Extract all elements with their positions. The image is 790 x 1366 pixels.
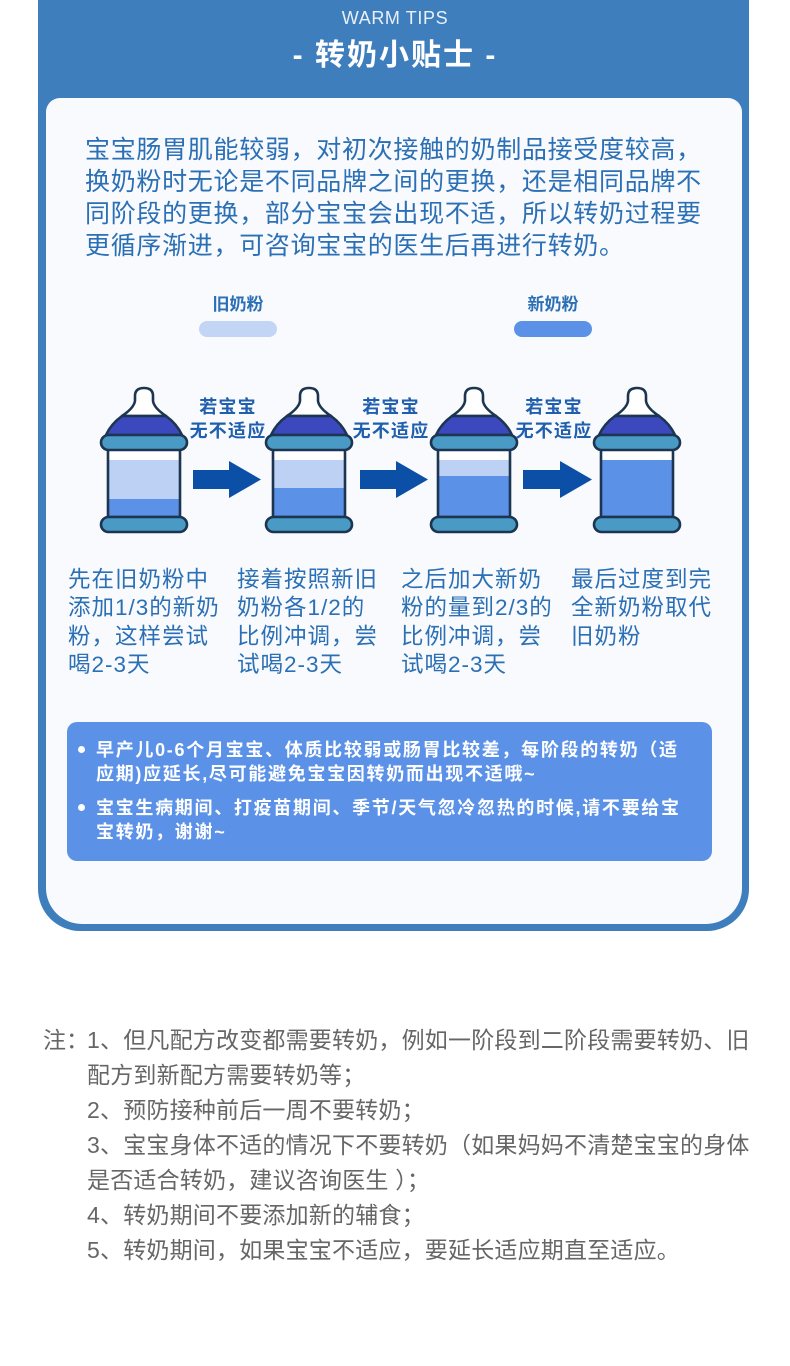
step 1 text: 喝2-3天 bbox=[68, 652, 151, 677]
arrow 2 bbox=[360, 461, 428, 498]
caution 1 text: 早产儿0-6个月宝宝、体质比较弱或肠胃比较差，每阶段的转奶（适 bbox=[96, 740, 679, 760]
caution 2 text: 宝转奶，谢谢~ bbox=[96, 822, 226, 842]
step 3 text: 比例冲调，尝 bbox=[401, 624, 542, 648]
intro paragraph: 同阶段的更换，部分宝宝会出现不适，所以转奶过程要 bbox=[85, 200, 702, 228]
intro paragraph bbox=[85, 136, 702, 260]
bottle 1: one third new bbox=[101, 388, 187, 532]
arrow caption 3: 若宝宝 bbox=[525, 397, 583, 417]
arrow caption 2: 若宝宝 bbox=[362, 397, 420, 417]
step 4 text bbox=[571, 566, 712, 648]
arrow caption 3: 无不适应 bbox=[516, 421, 592, 441]
step 1 text: 先在旧奶粉中 bbox=[68, 566, 209, 592]
step 4 text: 最后过度到完 bbox=[571, 566, 712, 592]
arrow caption 1: 若宝宝 bbox=[199, 397, 257, 417]
arrow caption 1 bbox=[190, 397, 266, 441]
notes: list: 是否适合转奶，建议咨询医生 ）； bbox=[87, 1167, 430, 1193]
bullet 1 bbox=[78, 746, 85, 753]
step 4 text: 旧奶粉 bbox=[571, 624, 642, 648]
bottle and arrow diagram bbox=[100, 386, 682, 534]
step 2 text: 比例冲调，尝 bbox=[237, 624, 378, 648]
arrow caption 2 bbox=[353, 397, 429, 441]
caution 1 text bbox=[96, 740, 679, 784]
step 3 text: 粉的量到2/3的 bbox=[401, 595, 553, 620]
caution 1 text: 应期)应延长,尽可能避免宝宝因转奶而出现不适哦~ bbox=[96, 764, 536, 784]
bottle 4: all new bbox=[594, 388, 680, 532]
notes: list: 1、但凡配方改变都需要转奶，例如一阶段到二阶段需要转奶、旧 bbox=[87, 1027, 750, 1053]
subtitle: WARM TIPS: WARM TIPS bbox=[342, 8, 448, 28]
bottle 3: two thirds new bbox=[431, 388, 517, 532]
title: - 转奶小贴士 - bbox=[293, 39, 497, 72]
intro paragraph: 更循序渐进，可咨询宝宝的医生后再进行转奶。 bbox=[85, 232, 625, 260]
bullet 2 bbox=[78, 804, 85, 811]
step 3 text: 试喝2-3天 bbox=[401, 652, 507, 677]
intro paragraph: 宝宝肠胃肌能较弱，对初次接触的奶制品接受度较高， bbox=[85, 136, 702, 164]
callout: cautions bbox=[67, 722, 712, 861]
arrow caption 2: 无不适应 bbox=[353, 421, 429, 441]
notes: list: 配方到新配方需要转奶等； bbox=[87, 1062, 365, 1088]
arrow caption 1: 无不适应 bbox=[190, 421, 266, 441]
panel: white content card bbox=[46, 98, 742, 924]
arrow 3 bbox=[523, 461, 592, 498]
step 1 text: 粉，这样尝试 bbox=[68, 624, 209, 648]
notes: list: 5、转奶期间，如果宝宝不适应，要延长适应期直至适应。 bbox=[87, 1237, 680, 1263]
legend: new formula swatch bbox=[514, 321, 592, 337]
step 2 text: 奶粉各1/2的 bbox=[237, 595, 365, 620]
intro paragraph: 换奶粉时无论是不同品牌之间的更换，还是相同品牌不 bbox=[85, 168, 702, 196]
caution 2 text: 宝宝生病期间、打疫苗期间、季节/天气忽冷忽热的时候,请不要给宝 bbox=[96, 798, 681, 818]
notes: list bbox=[87, 1027, 750, 1263]
step 1 text bbox=[68, 566, 220, 677]
step 3 text: 之后加大新奶 bbox=[401, 566, 542, 592]
legend: old formula label: 旧奶粉 bbox=[212, 295, 264, 314]
legend: old formula swatch bbox=[199, 321, 277, 337]
panel: blue header frame bbox=[38, 0, 749, 931]
step 2 text: 试喝2-3天 bbox=[237, 652, 343, 677]
caution 2 text bbox=[96, 798, 681, 842]
step 4 text: 全新奶粉取代 bbox=[571, 595, 712, 620]
step 2 text: 接着按照新旧 bbox=[237, 566, 378, 592]
notes: list: 2、预防接种前后一周不要转奶； bbox=[87, 1097, 425, 1123]
arrow caption 3 bbox=[516, 397, 592, 441]
legend: new formula label: 新奶粉 bbox=[528, 295, 578, 314]
step 2 text bbox=[237, 566, 378, 677]
step 1 text: 添加1/3的新奶 bbox=[68, 595, 220, 620]
notes: label: 注： bbox=[43, 1027, 89, 1053]
notes: list: 3、宝宝身体不适的情况下不要转奶（如果妈妈不清楚宝宝的身体 bbox=[87, 1132, 750, 1158]
notes: list: 4、转奶期间不要添加新的辅食； bbox=[87, 1202, 425, 1228]
bottle 2: half new bbox=[266, 388, 352, 532]
step 3 text bbox=[401, 566, 553, 677]
arrow 1 bbox=[193, 461, 261, 498]
